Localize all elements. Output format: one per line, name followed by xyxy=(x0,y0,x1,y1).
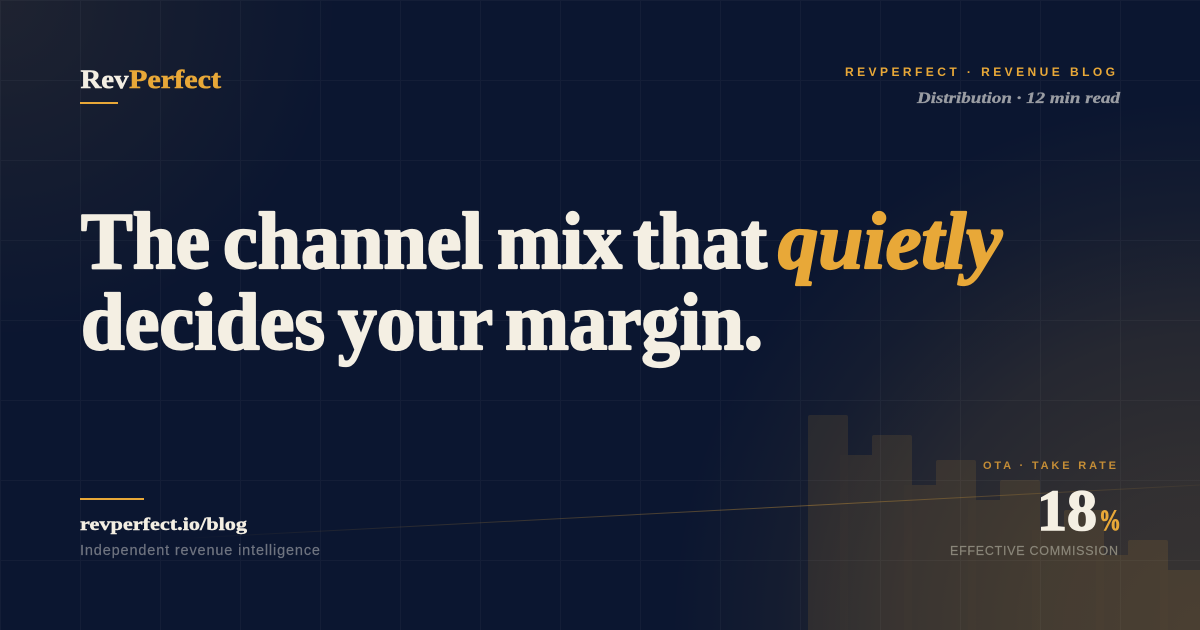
logo xyxy=(80,65,221,94)
footer url: revperfect.io/blog xyxy=(80,514,247,534)
headline: The xyxy=(81,198,210,286)
top label: REVPERFECT · REVENUE BLOG xyxy=(845,65,1115,79)
headline xyxy=(81,198,1002,367)
trend line xyxy=(0,485,1200,548)
stat value: % xyxy=(1099,504,1121,537)
stat value xyxy=(1037,478,1121,543)
headline: decides xyxy=(81,279,325,367)
logo underline xyxy=(80,102,118,104)
footer rule xyxy=(80,498,144,500)
stat label: OTA · TAKE RATE xyxy=(983,460,1116,472)
headline: mix xyxy=(497,198,622,286)
stat value: 18 xyxy=(1037,478,1097,543)
bar chart: decorative bars xyxy=(808,415,1200,630)
logo: Rev xyxy=(80,65,128,94)
headline: your xyxy=(338,279,493,367)
headline: channel xyxy=(223,198,483,286)
logo: Perfect xyxy=(129,65,221,94)
article meta: Distribution · 12 min read xyxy=(916,90,1121,107)
headline: that xyxy=(633,198,767,286)
headline: quietly xyxy=(778,198,1002,286)
stat caption: EFFECTIVE COMMISSION xyxy=(950,544,1118,558)
footer tagline: Independent revenue intelligence xyxy=(80,543,320,559)
headline: margin. xyxy=(505,279,763,367)
